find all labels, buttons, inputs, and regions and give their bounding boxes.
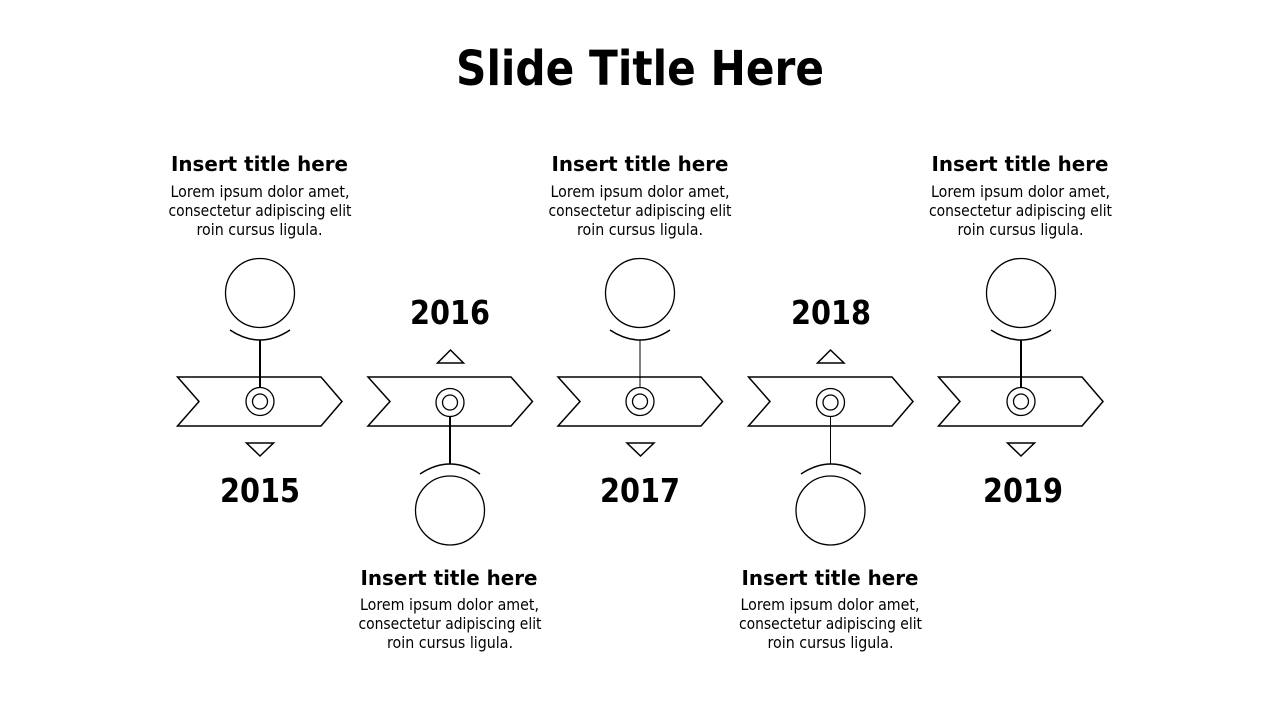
text block: 2017: Lorem ipsum dolor amet,: [550, 182, 730, 201]
year: 2019: 2019: [983, 471, 1063, 510]
text block: 2015: Lorem ipsum dolor amet,: [170, 182, 350, 201]
text block: 2019: consectetur adipiscing elit: [929, 201, 1112, 220]
icon circle: 2019: [986, 258, 1056, 328]
text block: 2016: roin cursus ligula.: [387, 633, 513, 652]
triangle: 2019: [1008, 443, 1034, 456]
text block: 2017: [548, 182, 732, 239]
title: Slide Title Here: [456, 41, 824, 97]
icon circle: 2015: [226, 258, 294, 328]
connector: 2017: [639, 340, 641, 388]
icon circle: 2018: [796, 476, 865, 545]
year: 2015: 2015: [220, 471, 300, 510]
text block: 2018: consectetur adipiscing elit: [739, 614, 922, 633]
arrow banner: 2017: [558, 377, 722, 426]
connector: 2018: [830, 415, 832, 464]
timeline item: 2016: [358, 293, 542, 652]
text block: 2019: roin cursus ligula.: [958, 220, 1084, 239]
heading: 2015: Insert title here: [171, 152, 348, 176]
year: 2017: 2017: [600, 471, 680, 510]
arrow banner: 2018: [748, 377, 913, 426]
timeline item: 2019: [929, 152, 1112, 510]
connector: 2015: [259, 340, 261, 388]
heading: 2016: Insert title here: [360, 566, 538, 590]
text block: 2019: [929, 182, 1112, 239]
arc: 2017: [610, 330, 670, 340]
marker: 2018: [816, 388, 844, 416]
timeline item: 2017: [548, 152, 732, 510]
text block: 2017: consectetur adipiscing elit: [548, 201, 732, 220]
text block: 2018: roin cursus ligula.: [768, 633, 894, 652]
text block: 2018: [739, 595, 922, 652]
text block: 2016: Lorem ipsum dolor amet,: [360, 595, 539, 614]
triangle: 2018: [818, 350, 844, 363]
timeline item: 2015: [168, 152, 352, 510]
arrow banner: 2019: [938, 377, 1103, 426]
text block: 2015: [168, 182, 352, 239]
heading: 2017: Insert title here: [552, 152, 728, 176]
year: 2016: 2016: [410, 293, 490, 332]
marker: 2019: [1007, 388, 1035, 416]
triangle: 2017: [627, 443, 654, 456]
marker: 2016: [436, 388, 464, 416]
text block: 2018: Lorem ipsum dolor amet,: [740, 595, 920, 614]
arc: 2018: [801, 464, 861, 474]
marker: 2017: [626, 388, 654, 416]
connector: 2019: [1020, 340, 1022, 388]
heading: 2018: Insert title here: [742, 566, 918, 590]
triangle: 2016: [438, 350, 464, 363]
text block: 2015: roin cursus ligula.: [196, 220, 322, 239]
triangle: 2015: [246, 443, 274, 456]
text block: 2016: [358, 595, 542, 652]
text block: 2016: consectetur adipiscing elit: [358, 614, 542, 633]
timeline item: 2018: [739, 293, 922, 652]
icon circle: 2017: [606, 258, 674, 328]
marker: 2015: [246, 388, 274, 416]
text block: 2015: consectetur adipiscing elit: [168, 201, 352, 220]
arrow banner: 2015: [178, 377, 342, 426]
connector: 2016: [449, 415, 451, 464]
year: 2018: 2018: [791, 293, 871, 332]
arc: 2015: [230, 330, 290, 340]
text block: 2019: Lorem ipsum dolor amet,: [931, 182, 1110, 201]
icon circle: 2016: [416, 476, 484, 545]
arc: 2016: [420, 464, 480, 474]
arrow banner: 2016: [368, 377, 532, 426]
text block: 2017: roin cursus ligula.: [577, 220, 703, 239]
arc: 2019: [991, 330, 1051, 340]
heading: 2019: Insert title here: [932, 152, 1108, 176]
